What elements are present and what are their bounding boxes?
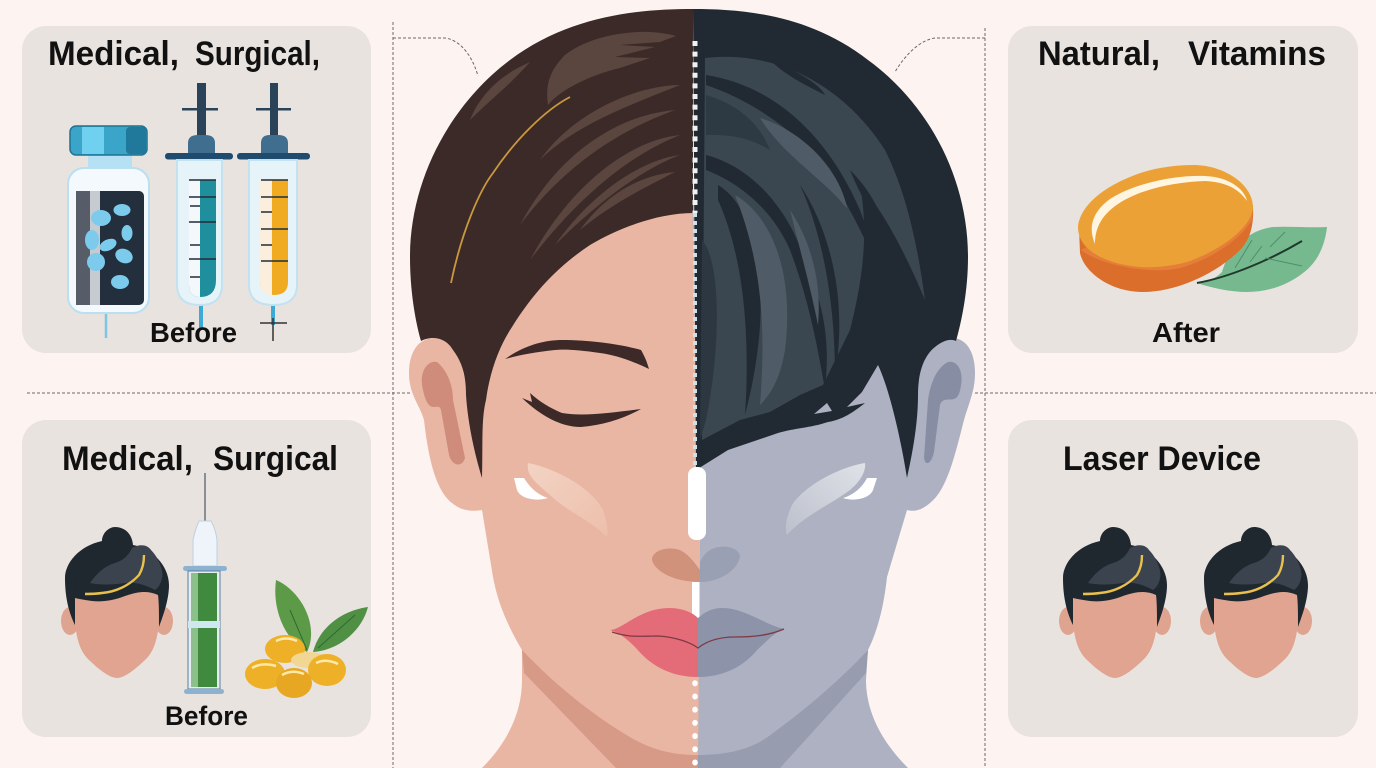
mouth line	[612, 629, 784, 648]
heading: bottom right: Laser Device	[1063, 440, 1261, 478]
heading: bottom left: Medical,	[62, 440, 193, 478]
eyebrow	[505, 340, 649, 369]
center dotted divider	[692, 41, 698, 213]
icon: head silhouette	[61, 527, 173, 678]
icon: teal syringe	[165, 83, 233, 328]
cheek sparkle right	[843, 478, 877, 500]
label: before: Before	[165, 701, 248, 731]
icon: vial	[68, 126, 149, 338]
panel: bottom right laser device	[1008, 420, 1358, 737]
small grey notch in fringe	[814, 403, 832, 414]
label: before: Before	[150, 317, 237, 348]
central split face	[409, 9, 975, 768]
white center bar	[688, 467, 706, 540]
hair: right dark	[693, 9, 968, 478]
lips left	[610, 608, 698, 677]
cheek highlight right	[786, 463, 865, 535]
hair highlights: right	[702, 57, 925, 440]
gold hair strand	[451, 97, 570, 283]
icon: head left	[1059, 527, 1171, 678]
face: right grey	[692, 200, 975, 768]
heading: top left: Medical,	[48, 35, 179, 73]
icon: vitamin capsule and leaf	[1078, 165, 1327, 292]
hair highlights: left	[470, 32, 680, 260]
panel: top left medical surgical	[22, 26, 371, 353]
icon: green syringe	[183, 473, 227, 694]
bottom center dots	[692, 683, 698, 768]
ear detail right	[924, 362, 962, 463]
heading: top right: Natural,	[1038, 35, 1160, 73]
cheek sparkle left	[514, 478, 548, 500]
nose right	[700, 547, 740, 582]
white philtrum bar	[692, 582, 700, 618]
closed eye	[522, 393, 641, 427]
icon: capsules and leaves	[245, 580, 368, 698]
ear detail left	[422, 362, 465, 464]
icon: yellow syringe	[237, 83, 310, 341]
heading: bottom left: Surgical	[213, 440, 338, 478]
label: after: After	[1152, 317, 1220, 348]
panel: bottom left medical surgical	[22, 420, 371, 737]
hair: left brown	[410, 9, 693, 478]
jaw shadow left	[522, 650, 698, 768]
heading: top right: Vitamins	[1188, 35, 1326, 73]
face: left skin	[409, 200, 700, 768]
cheek highlight left	[528, 463, 608, 537]
jaw shadow right	[698, 650, 868, 768]
lips right	[698, 608, 784, 677]
panel: top right natural vitamins	[1008, 26, 1358, 353]
nose left	[652, 548, 700, 582]
heading: top left: Surgical,	[195, 35, 320, 73]
icon: head right	[1200, 527, 1312, 678]
